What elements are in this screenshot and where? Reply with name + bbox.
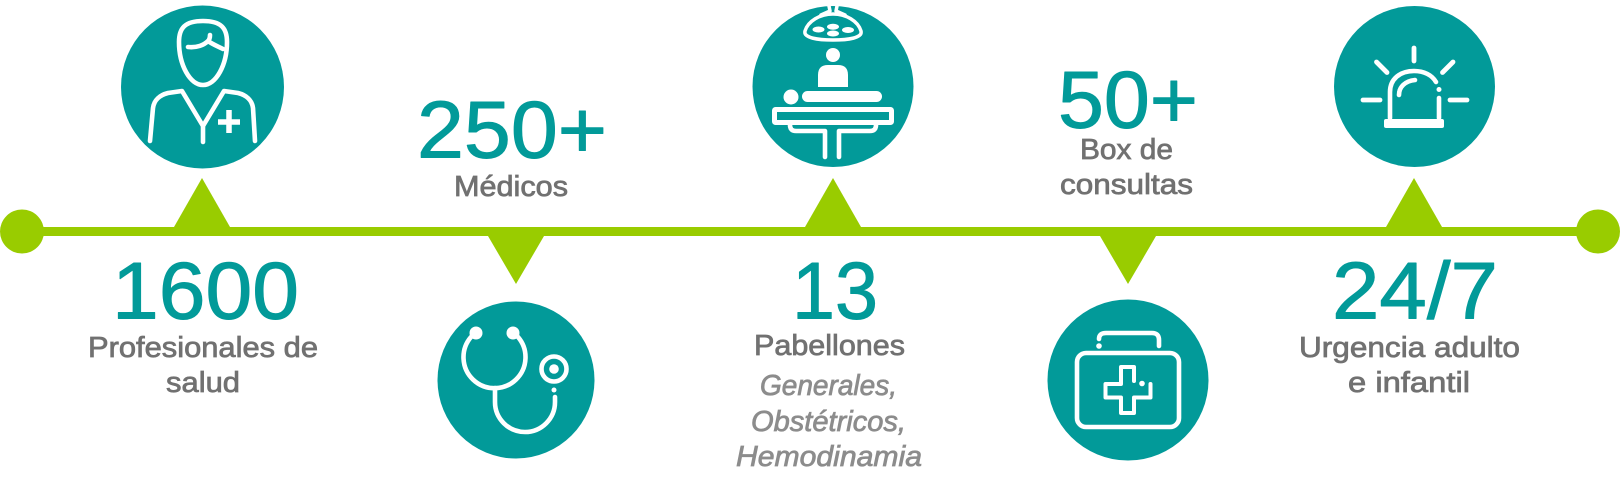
timeline axis	[0, 178, 1620, 284]
stat: 13 pabellones: 13	[792, 246, 878, 336]
icon: first aid kit	[1048, 300, 1208, 460]
stat: 50+ box de consultas: Box de	[1080, 134, 1173, 166]
stat: 13 pabellones	[736, 246, 922, 473]
icon: operating room	[752, 6, 914, 167]
stat: 24/7 urgencia adulto e infantil: Urgencia adulto	[1299, 332, 1520, 364]
stat: 24/7 urgencia adulto e infantil: e infantil	[1348, 367, 1470, 399]
icon: stethoscope	[438, 302, 594, 458]
icon: emergency siren	[1334, 6, 1495, 167]
icon: doctor	[121, 6, 284, 168]
stat: 13 pabellones: Hemodinamia	[736, 441, 922, 473]
stat: 50+ box de consultas: 50+	[1058, 56, 1198, 146]
stat: 24/7 urgencia adulto e infantil	[1299, 246, 1520, 399]
stat: 1600 profesionales de salud	[88, 246, 318, 399]
stat: 250+ médicos: 250+	[417, 86, 607, 176]
stat: 1600 profesionales de salud: 1600	[112, 246, 299, 336]
stat: 250+ médicos: Médicos	[454, 171, 568, 203]
stat: 24/7 urgencia adulto e infantil: 24/7	[1332, 246, 1498, 336]
stat: 1600 profesionales de salud: Profesionales de	[88, 332, 318, 364]
stat: 13 pabellones: Pabellones	[754, 330, 905, 362]
surgical lamp	[805, 6, 861, 40]
stat: 13 pabellones: Obstétricos,	[751, 406, 906, 438]
stat: 1600 profesionales de salud: salud	[166, 367, 240, 399]
stat: 50+ box de consultas: consultas	[1060, 169, 1193, 201]
stat: 13 pabellones: Generales,	[760, 370, 897, 402]
stat: 50+ box de consultas	[1058, 56, 1198, 201]
